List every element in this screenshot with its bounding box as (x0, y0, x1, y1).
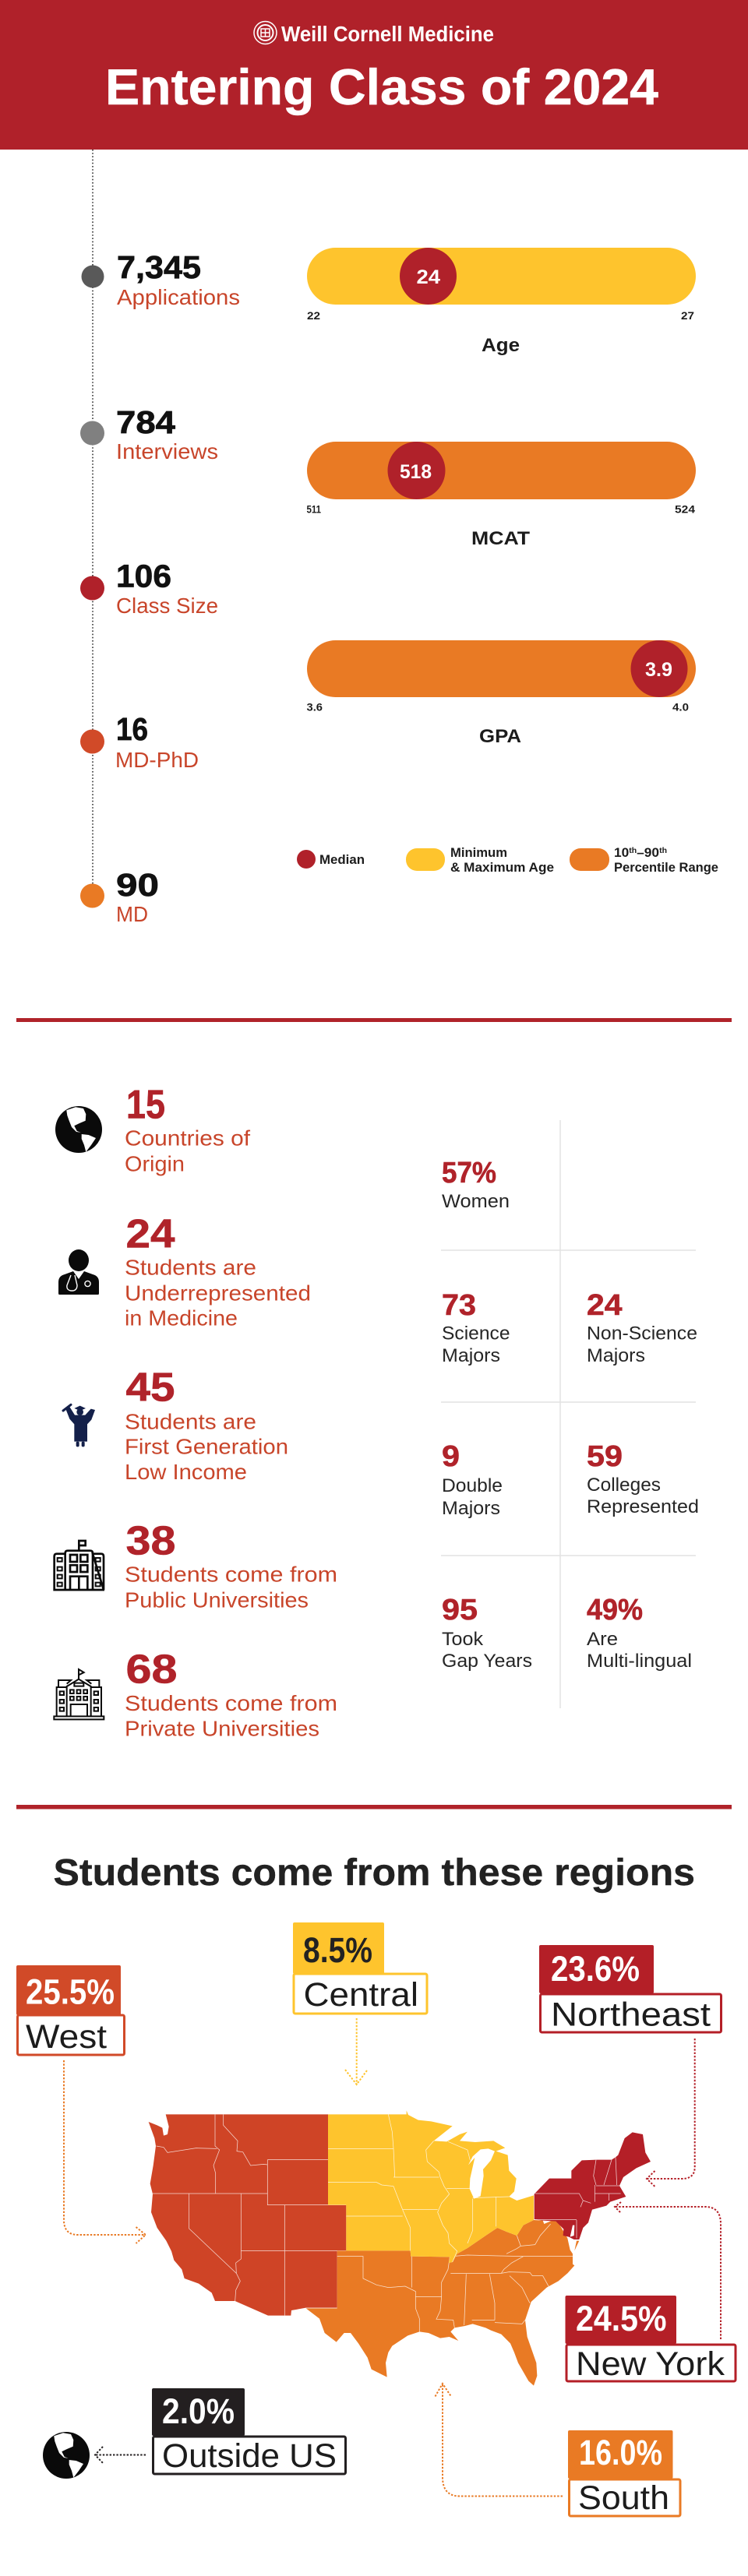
callout: outside us: Outside US (162, 2437, 337, 2475)
admissions timeline (80, 150, 240, 926)
timeline: class size: 106 (116, 558, 171, 594)
panel: class composition grid (441, 1120, 699, 1708)
stat: women: Women (442, 1191, 510, 1212)
range chart: gpa: 4.0 (672, 701, 689, 714)
stat: private universities: 68 (126, 1647, 178, 1692)
callout: south: South (578, 2479, 669, 2517)
range chart: age: 24 (416, 266, 440, 288)
stat: underrepresented in medicine (58, 1212, 311, 1330)
stat: double majors: 9 (442, 1440, 460, 1473)
timeline: class size: Class Size (116, 594, 218, 618)
arrow: south (435, 2384, 563, 2496)
stat: underrepresented in medicine: Underrepresented (125, 1281, 311, 1306)
callout: central: Central (304, 1976, 418, 2014)
stat: first generation low income (63, 1365, 288, 1484)
stat: countries of origin: 15 (126, 1083, 165, 1128)
panel: student background stats (53, 1083, 337, 1740)
icon: graduate (63, 1404, 95, 1447)
stat: gap years: Took (442, 1629, 484, 1650)
callout: northeast: Northeast (551, 1996, 711, 2033)
stat: private universities: Students come from (125, 1691, 337, 1715)
stat: private universities: Private Universities (125, 1717, 319, 1740)
callout: central (293, 1922, 427, 2014)
icon: globe outside us (43, 2432, 90, 2479)
stat: first generation low income: 45 (126, 1365, 175, 1410)
timeline: md: MD (116, 902, 148, 926)
stat: double majors (442, 1440, 503, 1519)
map: United States by region (149, 2110, 651, 2386)
callout: west (16, 1965, 125, 2056)
range chart: age: 22 (307, 310, 320, 322)
timeline: applications (81, 249, 240, 309)
stat: colleges represented: 59 (587, 1440, 623, 1473)
stat: colleges represented: Represented (587, 1496, 699, 1517)
range chart: gpa: 3.6 (307, 701, 323, 714)
chart legend: th (659, 847, 667, 855)
stat: underrepresented in medicine: Students are (125, 1256, 256, 1279)
callout: northeast (539, 1945, 722, 2033)
callout: south (568, 2430, 680, 2517)
range chart: gpa: GPA (479, 726, 521, 747)
timeline: md (80, 867, 159, 926)
arrow: outside us (95, 2447, 146, 2463)
range chart: mcat: MCAT (471, 528, 530, 549)
timeline: md-phd: 16 (116, 711, 148, 747)
logo seal (254, 22, 277, 44)
callout: south: 16.0% (579, 2433, 662, 2472)
stat: public universities: Students come from (125, 1563, 337, 1586)
callout: central: 8.5% (303, 1930, 372, 1970)
stat: double majors: Majors (442, 1498, 500, 1519)
stat: colleges represented: Colleges (587, 1475, 661, 1496)
stat: science majors (442, 1289, 510, 1366)
stat: underrepresented in medicine: in Medicine (125, 1306, 238, 1330)
heading: regions: Students come from these regions (53, 1852, 695, 1894)
callout: new york (566, 2296, 736, 2383)
timeline: class size (80, 558, 218, 618)
logo wordmark: Weill Cornell Medicine (281, 22, 494, 46)
icon: public university building (53, 1541, 104, 1590)
arrow: central (345, 2018, 368, 2084)
stat: countries of origin: Origin (125, 1151, 185, 1176)
timeline: interviews: Interviews (116, 439, 218, 463)
timeline: md: 90 (116, 867, 159, 903)
icon: doctor (58, 1249, 99, 1295)
timeline: applications: 7,345 (117, 249, 201, 285)
range chart: mcat (307, 442, 696, 549)
stat: multi-lingual (587, 1594, 692, 1672)
map region: south (306, 2220, 574, 2386)
stat: multi-lingual: Multi-lingual (587, 1651, 692, 1672)
stat: public universities: 38 (126, 1519, 176, 1564)
chart legend (297, 846, 718, 875)
stat: women (442, 1157, 510, 1212)
stat: science majors: 73 (442, 1289, 476, 1322)
stat: non-science majors (587, 1289, 697, 1366)
stat: first generation low income: Students are (125, 1410, 256, 1433)
stat: first generation low income: First Generation (125, 1435, 288, 1458)
callout: northeast: 23.6% (551, 1949, 640, 1989)
stat: public universities: Public Universities (125, 1588, 309, 1612)
stat: science majors: Science (442, 1323, 510, 1344)
stat: gap years: Gap Years (442, 1651, 532, 1672)
chart legend: th (629, 847, 637, 855)
chart legend: Minimum (450, 846, 507, 860)
range chart: age: 27 (681, 310, 694, 322)
stat: public universities (53, 1519, 337, 1612)
map region: west (149, 2114, 346, 2316)
stat: multi-lingual: 49% (587, 1594, 643, 1626)
range chart: gpa (307, 640, 696, 747)
timeline: interviews: 784 (116, 404, 175, 440)
stat: countries of origin: Countries of (125, 1126, 250, 1150)
chart legend: & Maximum Age (450, 861, 554, 875)
arrow: west (64, 2060, 146, 2243)
callout: west: 25.5% (26, 1972, 115, 2011)
range chart: mcat: 518 (400, 461, 432, 483)
stat: non-science majors: Majors (587, 1345, 645, 1366)
chart legend: Median (319, 853, 365, 867)
range chart: mcat: 511 (307, 503, 321, 516)
callout: west: West (26, 2018, 107, 2056)
map region: central (328, 2110, 534, 2263)
timeline: md-phd (80, 711, 199, 772)
range chart: mcat: 524 (675, 503, 696, 516)
stat: gap years: 95 (442, 1594, 478, 1626)
arrow: new york (615, 2202, 721, 2339)
title: Entering Class of 2024 (105, 58, 658, 115)
range chart: age (307, 248, 696, 356)
callout: new york: New York (576, 2345, 725, 2383)
stat: underrepresented in medicine: 24 (126, 1212, 175, 1257)
stat: multi-lingual: Are (587, 1629, 618, 1650)
icon: globe (55, 1106, 102, 1153)
callout: outside us (152, 2388, 346, 2475)
callout: outside us: 2.0% (162, 2391, 235, 2431)
icon: private university building (54, 1669, 104, 1719)
stat: non-science majors: 24 (587, 1289, 622, 1322)
chart legend: 10 (614, 846, 628, 860)
chart legend: –90 (637, 846, 659, 860)
stat: first generation low income: Low Income (125, 1460, 247, 1484)
header banner (0, 0, 748, 150)
stat: women: 57% (442, 1157, 496, 1189)
arrow: northeast (647, 2039, 695, 2187)
stat: non-science majors: Non-Science (587, 1323, 697, 1344)
stat: science majors: Majors (442, 1345, 500, 1366)
stat: double majors: Double (442, 1475, 503, 1496)
stat: colleges represented (587, 1440, 699, 1517)
range chart: gpa: 3.9 (645, 659, 672, 681)
callout: new york: 24.5% (576, 2299, 667, 2338)
stat: gap years (442, 1594, 532, 1672)
stat: countries of origin (55, 1083, 250, 1176)
chart legend: Percentile Range (614, 861, 718, 875)
timeline: applications: Applications (117, 285, 240, 309)
timeline: md-phd: MD-PhD (115, 748, 199, 772)
range chart: age: Age (482, 335, 520, 356)
stat: private universities (54, 1647, 337, 1740)
timeline: interviews (80, 404, 218, 463)
map region: northeast (535, 2132, 651, 2250)
